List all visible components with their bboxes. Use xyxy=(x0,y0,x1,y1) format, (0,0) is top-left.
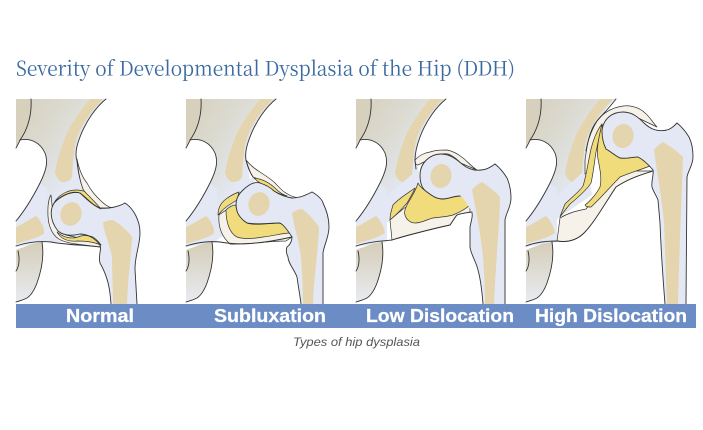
label bar xyxy=(16,304,696,328)
panel: low dislocation xyxy=(356,99,511,304)
panel: normal hip xyxy=(16,99,140,304)
panel: subluxation xyxy=(186,99,329,304)
label: Subluxation: Subluxation xyxy=(214,306,326,326)
label: Normal: Normal xyxy=(66,306,134,326)
title: Severity of Developmental Dysplasia of the Hip (DDH) xyxy=(16,52,515,82)
panel: high dislocation xyxy=(526,99,693,304)
caption: Types of hip dysplasia xyxy=(293,335,420,349)
label: Low Dislocation: Low Dislocation xyxy=(366,306,514,326)
label: High Dislocation: High Dislocation xyxy=(535,306,687,326)
